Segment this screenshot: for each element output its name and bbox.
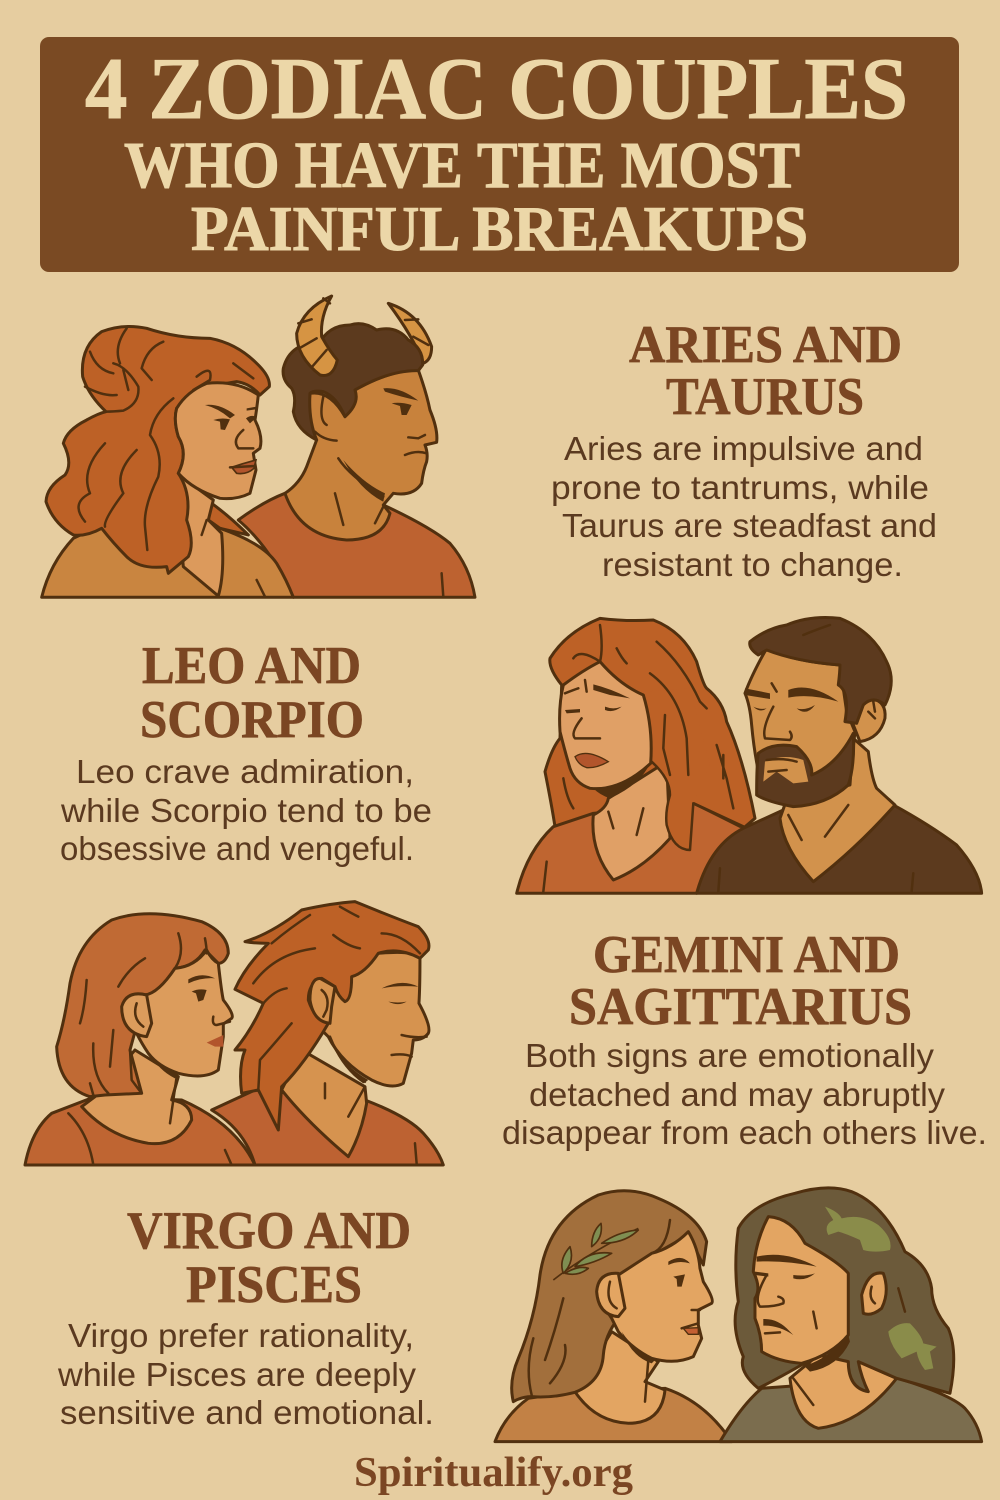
heading and text: Gemini and Sagittarius: Both signs are emotionally (525, 1037, 935, 1074)
title banner: PAINFUL BREAKUPS (191, 193, 808, 264)
heading and text: Gemini and Sagittarius: SAGITTARIUS (569, 978, 912, 1036)
illustration: Gemini and Sagittarius couple (25, 902, 443, 1165)
heading and text: Aries and Taurus: ARIES AND (629, 316, 902, 374)
heading and text: Leo and Scorpio: Leo crave admiration, (76, 753, 414, 790)
heading and text: Aries and Taurus (551, 316, 937, 583)
heading and text: Leo and Scorpio: SCORPIO (140, 691, 364, 749)
heading and text: Leo and Scorpio: LEO AND (142, 637, 361, 695)
heading and text: Virgo and Pisces: while Pisces are deeply (57, 1356, 417, 1393)
illustration: Virgo and Pisces couple (495, 1188, 982, 1442)
heading and text: Leo and Scorpio (60, 637, 432, 867)
heading and text: Leo and Scorpio: while Scorpio tend to be (60, 792, 432, 829)
icon: laurel sprig (553, 1223, 638, 1280)
icon: pisces fish upper (825, 1207, 891, 1252)
heading and text: Gemini and Sagittarius: disappear from each others live. (502, 1114, 987, 1151)
heading and text: Aries and Taurus: prone to tantrums, while (551, 469, 929, 506)
heading and text: Virgo and Pisces: Virgo prefer rationality, (68, 1317, 414, 1354)
heading and text: Gemini and Sagittarius: GEMINI AND (593, 926, 900, 984)
heading and text: Virgo and Pisces (57, 1202, 434, 1431)
icon: pisces fish lower (888, 1323, 937, 1370)
heading and text: Gemini and Sagittarius (502, 926, 987, 1151)
heading and text: Leo and Scorpio: obsessive and vengeful. (60, 830, 414, 867)
heading and text: Aries and Taurus: TAURUS (666, 368, 864, 426)
heading and text: Virgo and Pisces: VIRGO AND (127, 1202, 411, 1260)
heading and text: Virgo and Pisces: sensitive and emotional. (60, 1394, 434, 1431)
title banner (40, 37, 959, 272)
heading and text: Virgo and Pisces: PISCES (186, 1256, 362, 1314)
footer: website name: Spiritualify.org (354, 1450, 633, 1496)
heading and text: Aries and Taurus: Aries are impulsive and (564, 430, 923, 467)
title banner: 4 ZODIAC COUPLES (85, 41, 908, 138)
heading and text: Aries and Taurus: resistant to change. (602, 546, 903, 583)
title banner: WHO HAVE THE MOST (124, 129, 800, 202)
illustration: Aries and Taurus couple (42, 296, 475, 597)
heading and text: Gemini and Sagittarius: detached and may abruptly (529, 1076, 946, 1113)
heading and text: Aries and Taurus: Taurus are steadfast and (562, 507, 937, 544)
illustration: Leo and Scorpio couple (517, 617, 982, 893)
